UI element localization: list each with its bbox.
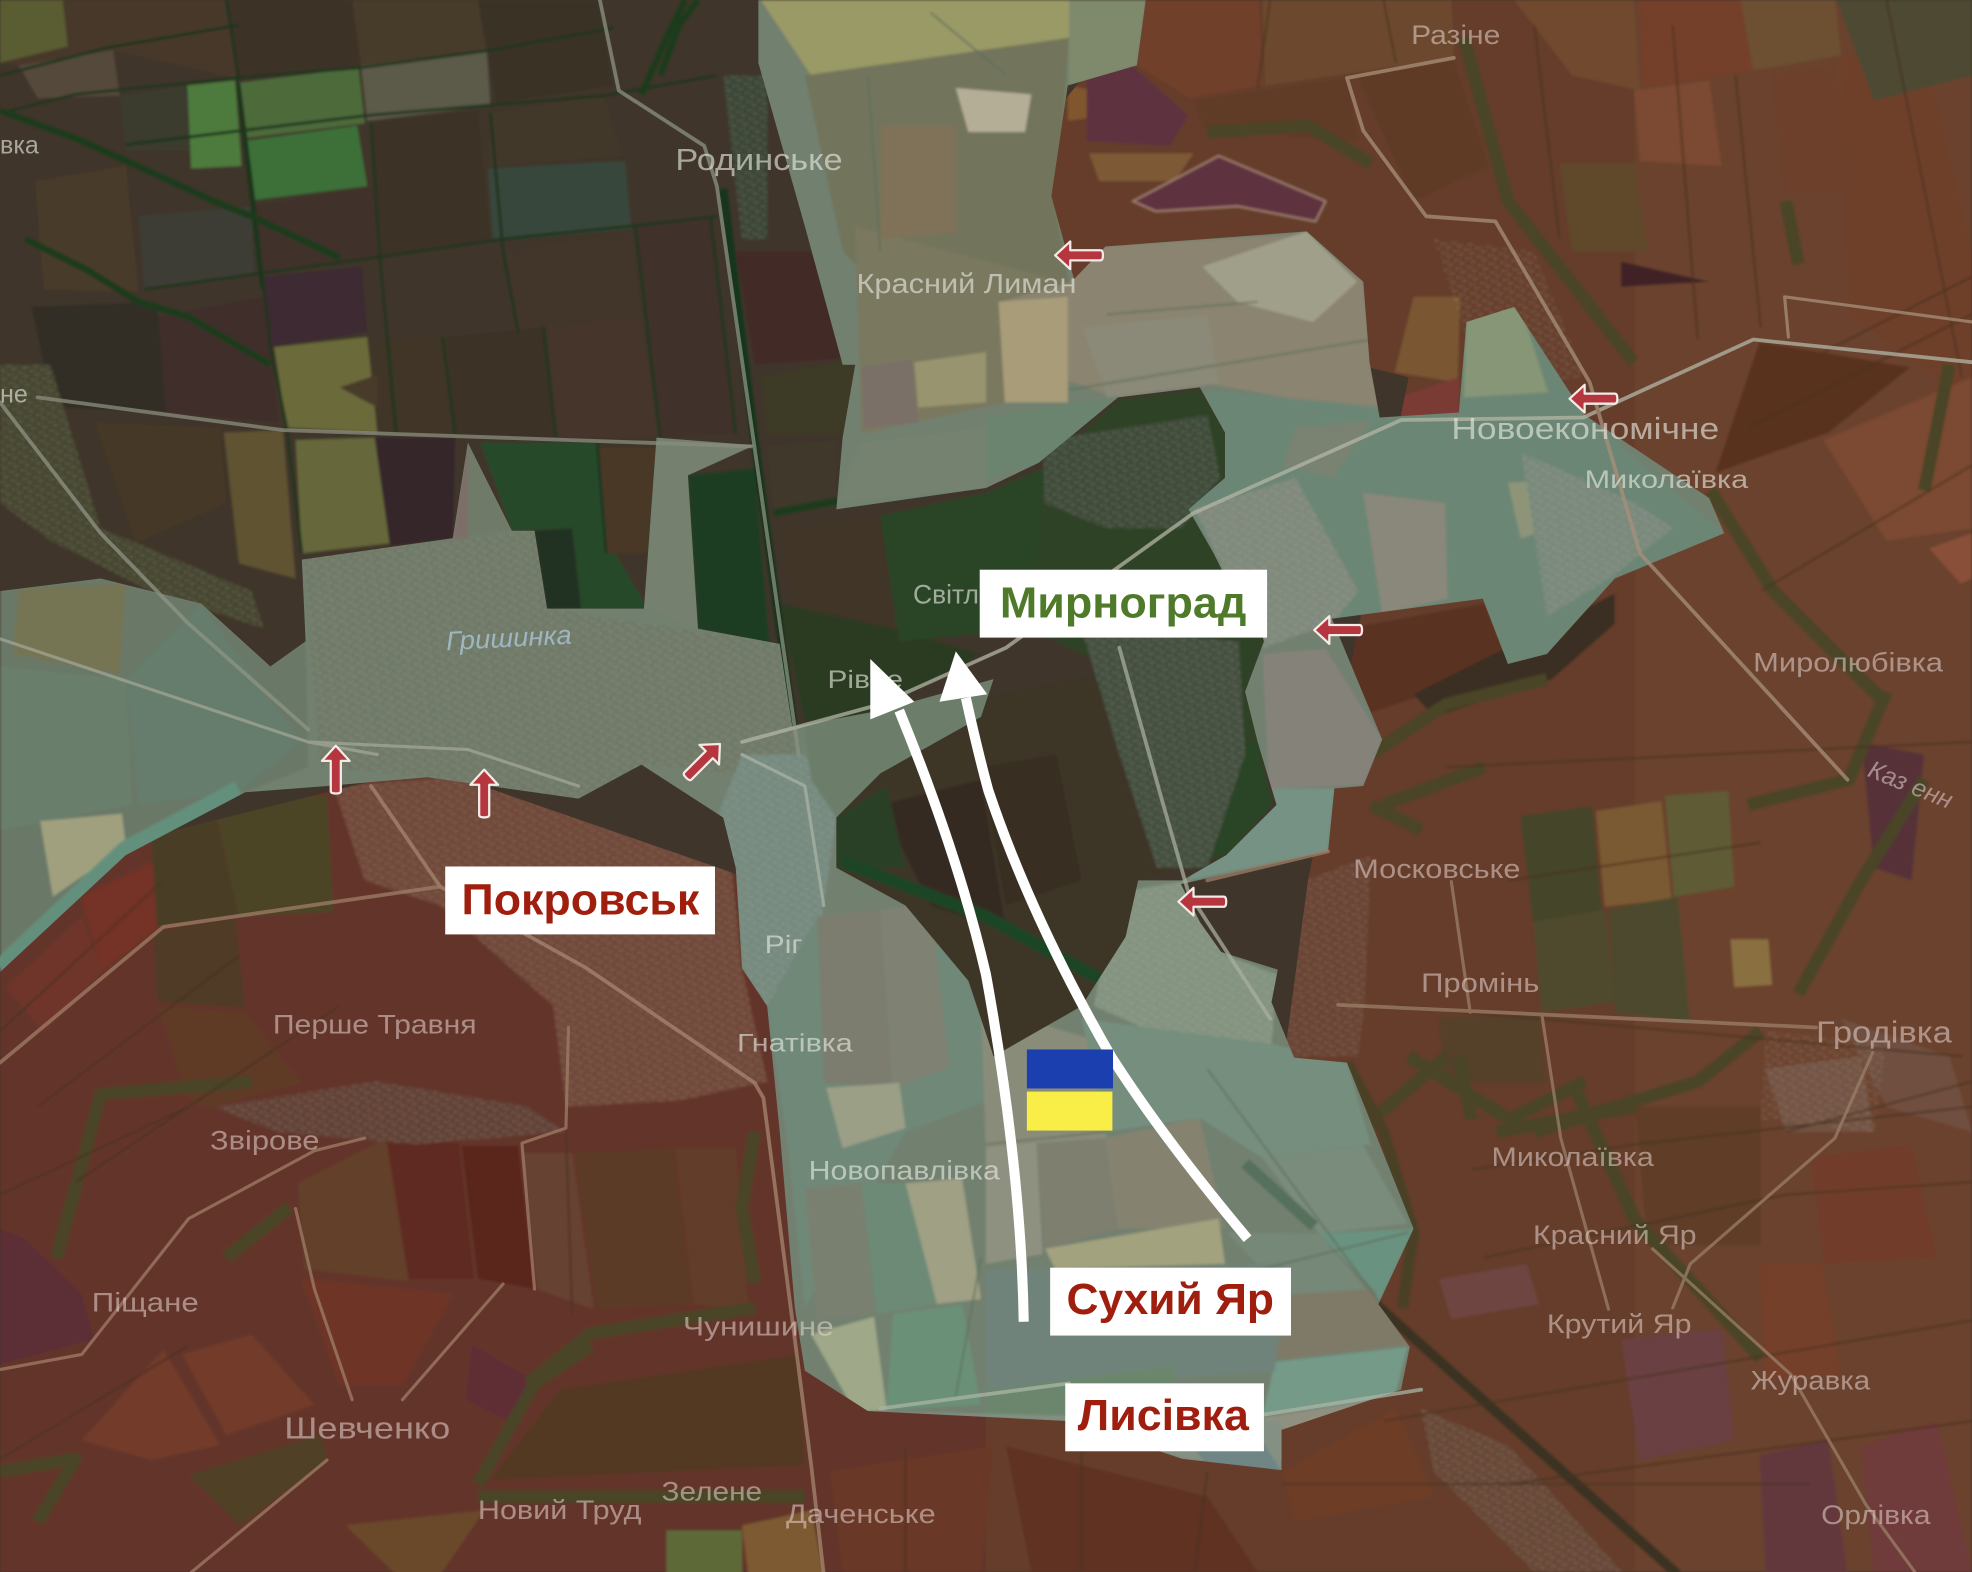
river: Гришинка: Гришинка [445, 620, 572, 656]
white arrow: from south towards Рівне [870, 659, 1024, 1322]
place: Шевченко: Шевченко [284, 1413, 450, 1446]
place: Журавка: Журавка [1751, 1366, 1870, 1396]
river fragment: Казенний: Каз енн [1864, 756, 1957, 815]
place: Гнатівка: Гнатівка [737, 1029, 853, 1057]
place: Світле: Світле [913, 580, 994, 610]
place: Красний Лиман: Красний Лиман [856, 268, 1077, 299]
place: Родинське: Родинське [675, 144, 843, 177]
small arrow north of Покровськ centre [470, 770, 498, 817]
place: Московське: Московське [1353, 854, 1521, 884]
place: Разіне: Разіне [1411, 20, 1500, 50]
small arrow north-east of Покровськ [676, 734, 730, 788]
place: Новий Труд: Новий Труд [478, 1495, 641, 1525]
small arrow south of Мирноград [1178, 888, 1226, 916]
place: Миролюбівка: Миролюбівка [1753, 648, 1943, 678]
place: Звірове: Звірове [210, 1125, 319, 1155]
label: Лисівка [1065, 1383, 1264, 1451]
place: Промінь: Промінь [1421, 968, 1539, 998]
place: Чунишине: Чунишине [683, 1312, 834, 1342]
white arrow: from south-east towards Мирноград [939, 651, 1248, 1239]
place: Гродівка: Гродівка [1816, 1017, 1952, 1050]
red arrows: Russian advance directions [322, 241, 1617, 916]
place: Даченське: Даченське [786, 1499, 936, 1529]
place: Крутий Яр: Крутий Яр [1547, 1309, 1692, 1339]
place: Перше Травня: Перше Травня [273, 1010, 477, 1040]
place: Зелене: Зелене [662, 1476, 762, 1506]
place: Рівне: Рівне [828, 666, 903, 694]
place: Миколаївка north: Миколаївка [1585, 466, 1748, 494]
place: Новопавлівка: Новопавлівка [809, 1156, 1000, 1186]
label: Мирноград [980, 570, 1267, 638]
label: Покровськ: Покровськ [462, 875, 700, 924]
icon: Ukrainian flag [1027, 1049, 1113, 1131]
place: Піщане: Піщане [92, 1288, 199, 1318]
small arrow north of Покровськ west [322, 746, 350, 794]
place: Миколаївка south: Миколаївка [1492, 1142, 1654, 1172]
place fragment: вка: вка [0, 131, 39, 159]
place: Орлівка: Орлівка [1821, 1500, 1931, 1530]
small arrow at Красний Лиман [1055, 241, 1103, 269]
small arrow east of Мирноград [1314, 616, 1362, 644]
label: Сухий Яр: Сухий Яр [1066, 1275, 1274, 1324]
place fragment: не: не [0, 380, 28, 408]
label: Сухий Яр [1050, 1268, 1291, 1336]
place: Ріг: Ріг [765, 931, 802, 959]
small arrow at Новоекономічне [1570, 385, 1617, 412]
label: Лисівка: Лисівка [1078, 1391, 1249, 1440]
place: Новоекономічне: Новоекономічне [1451, 413, 1719, 446]
label: Мирноград: Мирноград [1000, 578, 1246, 627]
place: Красний Яр: Красний Яр [1533, 1220, 1697, 1250]
label: Покровськ [445, 866, 715, 934]
